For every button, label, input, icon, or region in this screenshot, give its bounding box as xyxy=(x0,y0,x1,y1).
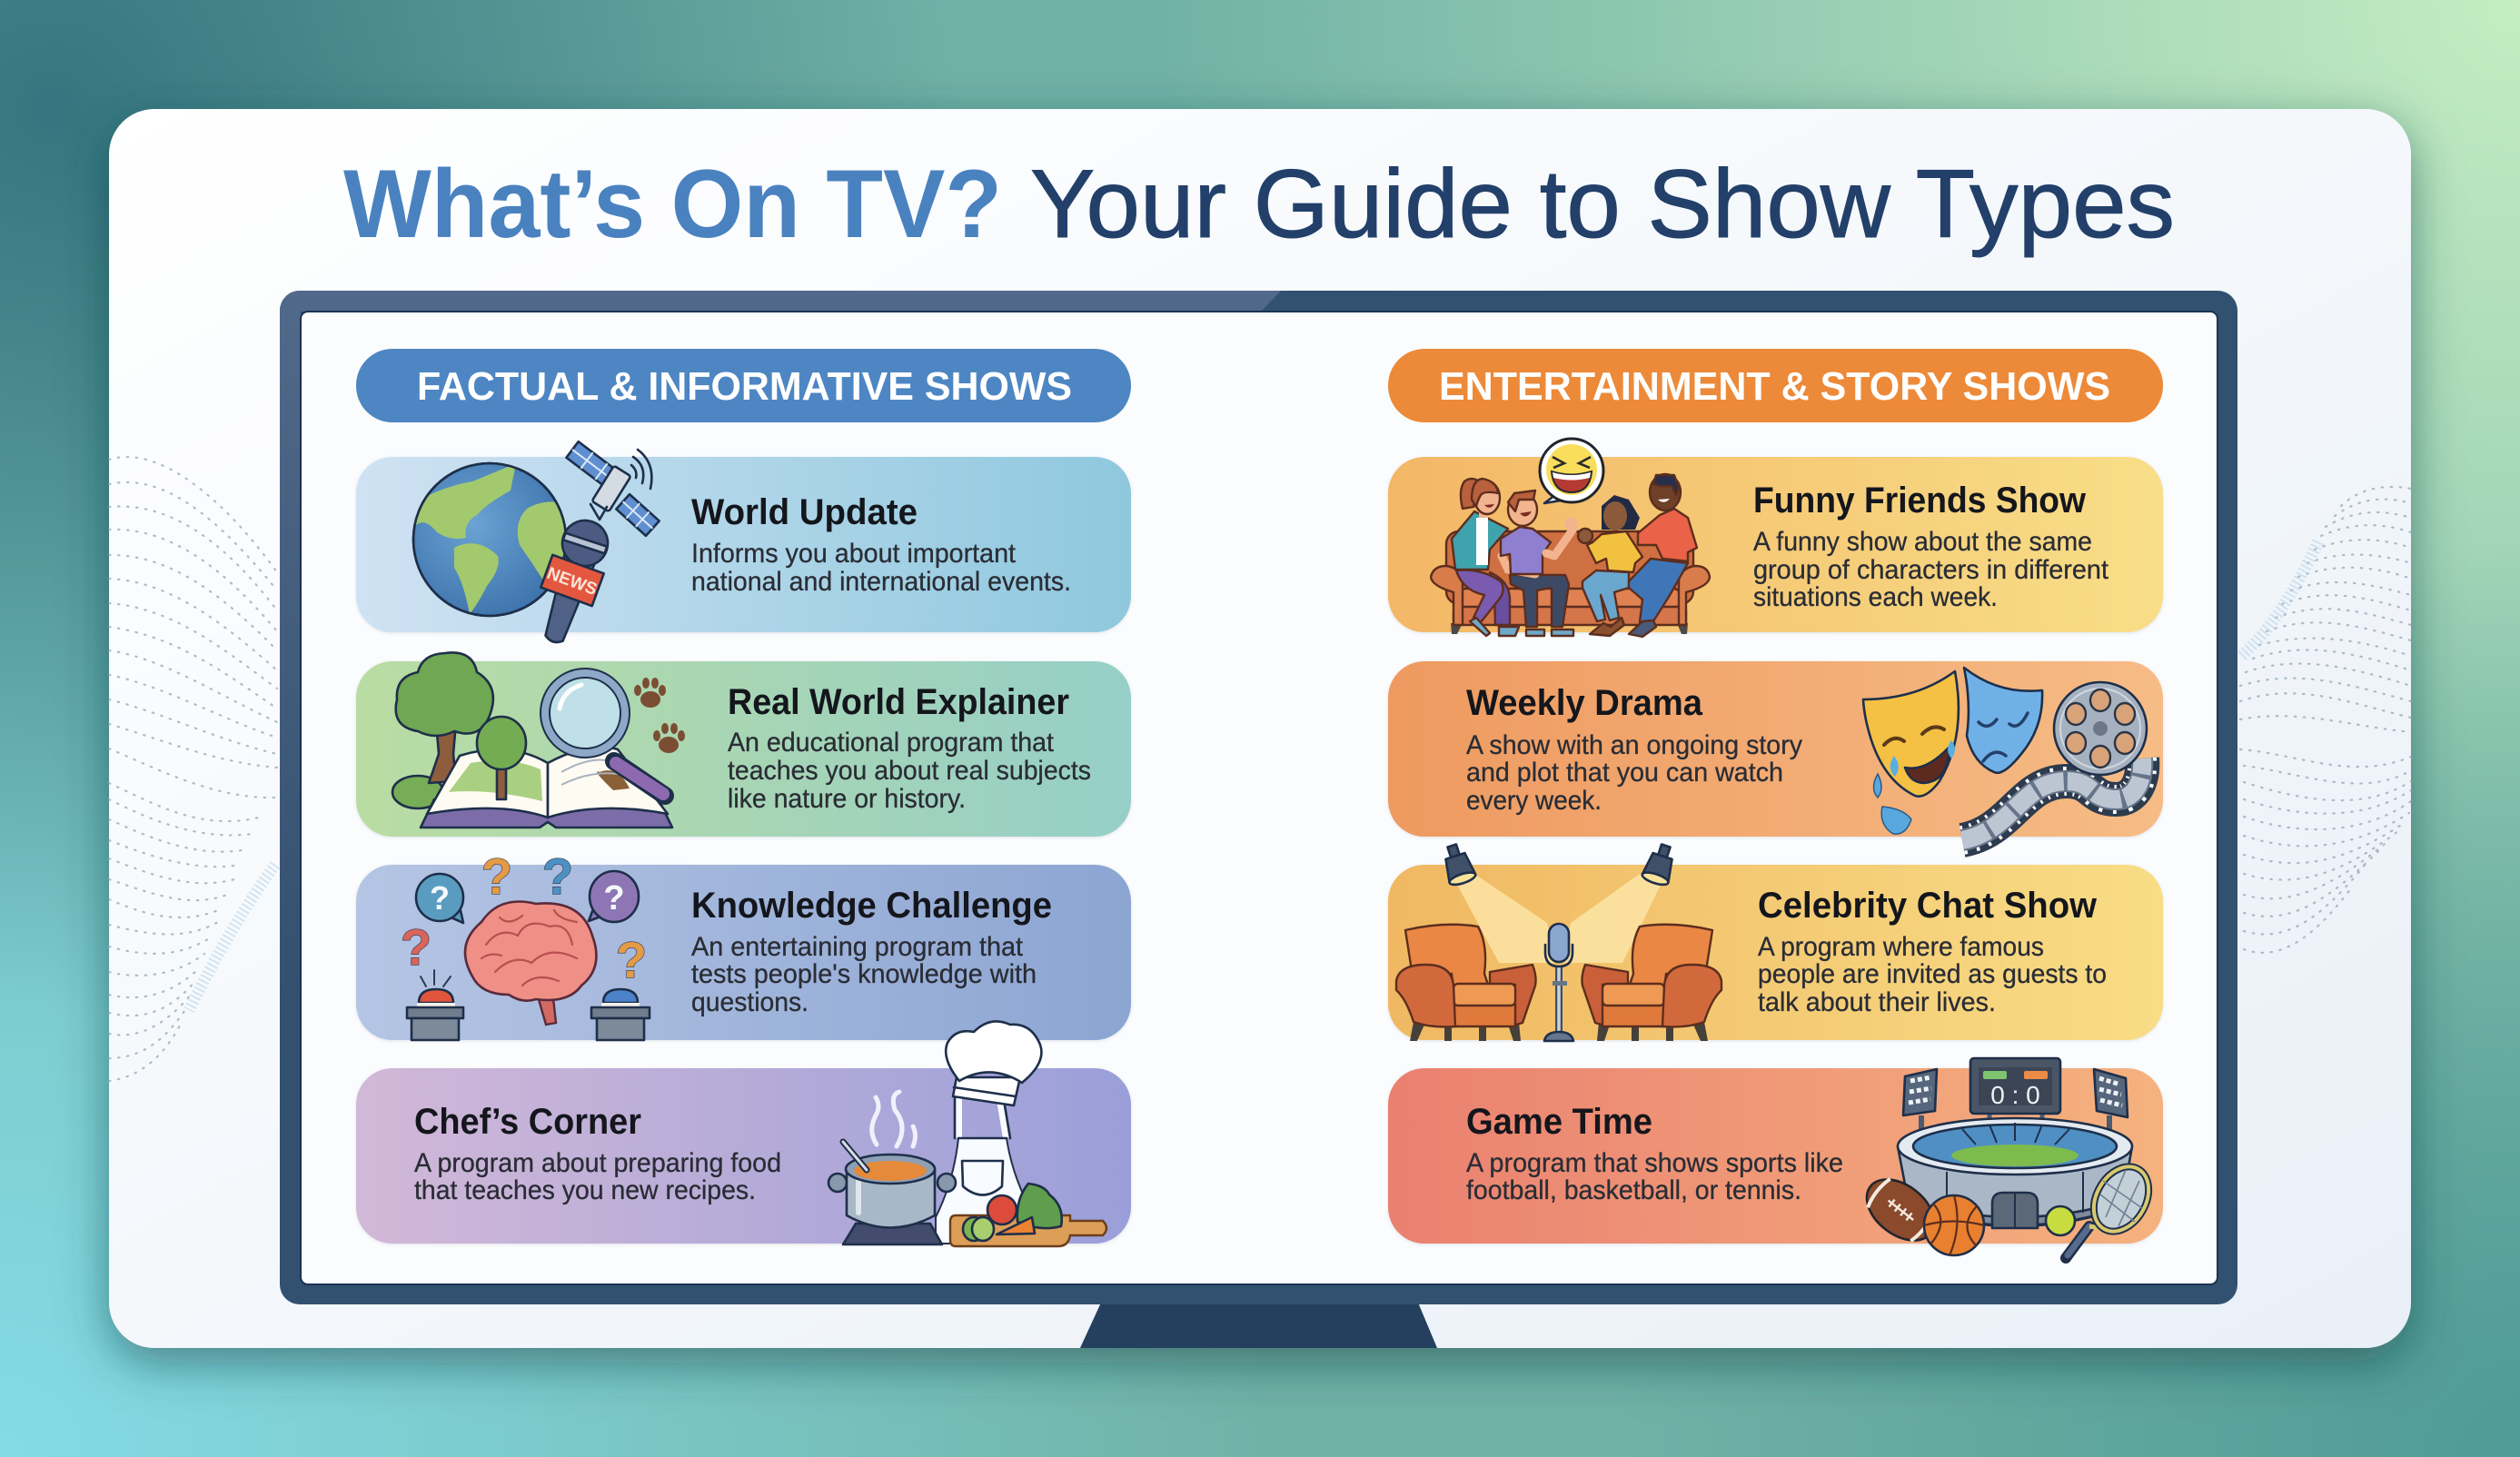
description: and plot that you can watch xyxy=(1466,758,1783,788)
right armchair xyxy=(1582,925,1721,1041)
card: Game Time xyxy=(1388,1068,2163,1244)
light beams xyxy=(1454,874,1663,963)
heading: Real World Explainer xyxy=(728,682,1069,722)
satellite xyxy=(566,441,660,536)
icon: brain, question marks and buzzers xyxy=(401,847,650,1040)
left armchair xyxy=(1396,925,1536,1041)
stove xyxy=(843,1224,942,1244)
scoreboard: 0 : 0 xyxy=(1990,1081,2040,1109)
description: teaches you about real subjects xyxy=(728,756,1091,786)
card: Funny Friends Show xyxy=(1388,457,2163,632)
description: situations each week. xyxy=(1753,582,1998,612)
description: that teaches you new recipes. xyxy=(414,1175,756,1205)
title: Your Guide to Show Types xyxy=(1030,149,2175,258)
sad blue mask xyxy=(1964,668,2042,773)
description: An entertaining program that xyxy=(691,932,1023,962)
title xyxy=(343,149,2175,258)
icon: chef hat, apron, pot and vegetables xyxy=(828,1021,1106,1246)
apron xyxy=(936,1095,1037,1244)
pot xyxy=(828,1142,956,1228)
left lamp xyxy=(1439,841,1477,887)
description: like nature or history. xyxy=(728,784,966,814)
tear drops xyxy=(1873,774,1911,834)
icon: comedy and tragedy masks with film reel xyxy=(1863,668,2147,840)
news flag: NEWS xyxy=(544,564,600,600)
friend 3 xyxy=(1578,495,1642,636)
vegetables xyxy=(963,1184,1062,1241)
icon: four friends on a sofa with laughing bubble xyxy=(1431,439,1710,637)
large tree xyxy=(396,652,493,783)
stadium xyxy=(1898,1118,2132,1228)
question marks xyxy=(401,847,647,988)
friend 4 xyxy=(1629,474,1697,637)
cutting board xyxy=(950,1215,1106,1246)
main white panel xyxy=(109,109,2411,1348)
sofa xyxy=(1431,531,1710,634)
description xyxy=(691,932,1037,1017)
description: A program that shows sports like xyxy=(1466,1148,1843,1178)
decorative dotted wave: left xyxy=(109,457,277,1081)
icon: globe, satellite and news microphone xyxy=(413,441,660,649)
film reel xyxy=(2054,682,2147,775)
friend 1 xyxy=(1452,479,1519,636)
description: A program about preparing food xyxy=(414,1148,781,1178)
speech bubbles xyxy=(416,871,639,923)
column header: entertainment xyxy=(1388,349,2163,422)
magnifying glass xyxy=(545,673,665,796)
news flag xyxy=(541,555,604,606)
question marks: ? xyxy=(542,847,573,905)
floodlights xyxy=(1903,1069,2128,1143)
card: Celebrity Chat Show xyxy=(1388,865,2163,1040)
column header: entertainment: ENTERTAINMENT & STORY SHOWS xyxy=(1439,364,2110,409)
description: An educational program that xyxy=(728,728,1054,758)
steam xyxy=(872,1092,916,1146)
speech bubbles: ? xyxy=(430,879,450,917)
card: World Update xyxy=(356,457,1131,632)
basketball xyxy=(1924,1195,1984,1255)
TV frame xyxy=(280,291,2237,1304)
question marks: ? xyxy=(481,847,512,905)
description xyxy=(691,539,1071,597)
icon: tree, open book and magnifying glass xyxy=(392,652,685,828)
description: football, basketball, or tennis. xyxy=(1466,1175,1801,1205)
tennis ball xyxy=(2046,1206,2075,1235)
description: tests people's knowledge with xyxy=(691,959,1037,989)
column header: factual: FACTUAL & INFORMATIVE SHOWS xyxy=(417,364,1072,409)
question marks: ? xyxy=(401,918,432,976)
card: Knowledge Challenge xyxy=(356,865,1131,1040)
heading: Funny Friends Show xyxy=(1753,481,2087,520)
title: What’s On TV? xyxy=(343,149,1002,258)
heading: Knowledge Challenge xyxy=(691,886,1052,926)
icon: two spotlights, armchairs and microphone xyxy=(1396,841,1721,1041)
question marks: ? xyxy=(616,931,647,988)
right lamp xyxy=(1641,841,1679,887)
card: Weekly Drama xyxy=(1388,661,2163,837)
description xyxy=(1758,932,2107,1017)
description: questions. xyxy=(691,987,809,1017)
brain xyxy=(465,901,596,1025)
description: every week. xyxy=(1466,786,1602,816)
column header: factual xyxy=(356,349,1131,422)
card: Real World Explainer xyxy=(356,661,1131,837)
heading: Chef’s Corner xyxy=(414,1102,641,1142)
football xyxy=(1855,1167,1946,1253)
description: group of characters in different xyxy=(1753,555,2108,585)
decorative dotted wave: right xyxy=(2240,487,2411,953)
chef hat xyxy=(946,1021,1041,1105)
description: talk about their lives. xyxy=(1758,987,1996,1017)
description: Informs you about important xyxy=(691,539,1016,569)
description xyxy=(1466,1148,1843,1205)
description: national and international events. xyxy=(691,567,1071,597)
blue buzzer xyxy=(591,989,650,1040)
open book xyxy=(421,747,672,828)
heading: Celebrity Chat Show xyxy=(1758,886,2098,926)
tennis racket xyxy=(2066,1157,2159,1258)
scoreboard xyxy=(1970,1058,2060,1126)
happy gold mask xyxy=(1863,671,1959,797)
icon: stadium, scoreboard and sports balls xyxy=(1855,1058,2159,1258)
description: A funny show about the same xyxy=(1753,527,2092,557)
heading: Game Time xyxy=(1466,1102,1652,1142)
speech bubbles: ? xyxy=(603,879,625,917)
laughing speech bubble xyxy=(1540,439,1603,503)
heading: World Update xyxy=(691,492,918,532)
description xyxy=(1753,527,2108,612)
friend 2 xyxy=(1501,491,1577,636)
description xyxy=(1466,730,1802,816)
studio microphone xyxy=(1544,924,1573,1041)
card: Chef's Corner xyxy=(356,1068,1131,1244)
small tree xyxy=(477,717,526,799)
TV stand xyxy=(1080,1303,1437,1348)
red buzzer xyxy=(407,970,463,1040)
film strip xyxy=(1962,758,2142,840)
description: people are invited as guests to xyxy=(1758,959,2107,989)
microphone xyxy=(531,514,614,649)
heading: Weekly Drama xyxy=(1466,683,1703,723)
bush xyxy=(392,776,443,808)
description xyxy=(414,1148,781,1205)
description: A show with an ongoing story xyxy=(1466,730,1802,760)
paw prints xyxy=(634,678,685,753)
globe xyxy=(413,463,570,616)
description xyxy=(728,728,1091,814)
description: A program where famous xyxy=(1758,932,2044,962)
